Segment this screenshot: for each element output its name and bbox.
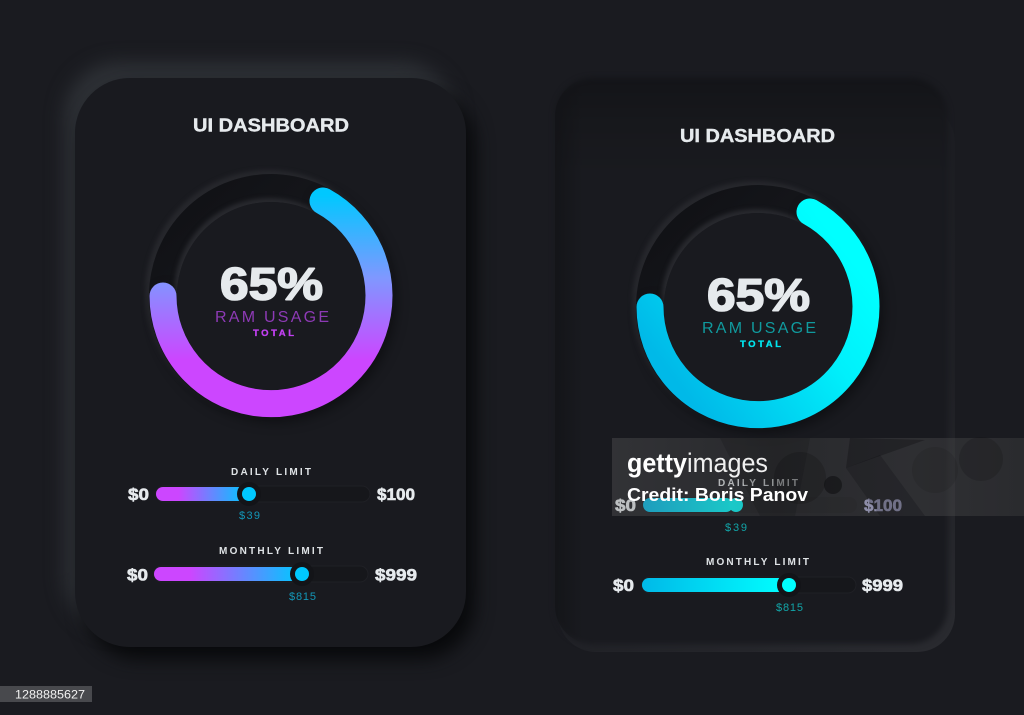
panel: cyan dashboard card <box>555 78 955 652</box>
slider: purple monthly limit: MONTHLY LIMIT <box>219 546 323 557</box>
slider: purple monthly limit: $0 <box>127 566 148 584</box>
watermark logo: images <box>687 448 768 478</box>
slider: cyan monthly limit <box>613 557 903 614</box>
slider: purple daily limit: $100 <box>377 485 415 504</box>
slider: purple daily limit: $0 <box>128 485 149 504</box>
slider: cyan monthly limit: $815 <box>776 602 803 614</box>
ring value: 65% <box>220 258 323 310</box>
heading: cyan card title: UI DASHBOARD <box>680 126 835 146</box>
slider: cyan monthly limit: MONTHLY LIMIT <box>706 557 809 568</box>
watermark logo: getty <box>627 448 687 478</box>
slider: purple daily limit: DAILY LIMIT <box>231 467 311 478</box>
chart: cyan RAM usage ring <box>632 181 880 429</box>
slider: cyan daily limit: $39 <box>725 522 747 534</box>
slider: cyan daily limit: $100 <box>864 496 902 515</box>
slider: purple monthly limit: $815 <box>289 591 316 603</box>
slider: cyan daily limit: $0 <box>615 496 636 515</box>
watermark banner <box>612 437 1024 516</box>
panel: purple dashboard card <box>64 62 475 659</box>
ring sublabel: TOTAL <box>253 328 294 339</box>
image id tag <box>0 686 92 702</box>
slider: cyan daily limit: DAILY LIMIT <box>718 478 798 489</box>
watermark credit: Credit: Boris Panov <box>627 485 808 505</box>
slider: purple daily limit: $39 <box>239 510 260 522</box>
slider: cyan monthly limit: $999 <box>862 576 903 595</box>
slider: purple daily limit <box>128 467 415 522</box>
ring value: 65% <box>707 270 810 320</box>
ring label: RAM USAGE <box>215 309 329 326</box>
ring label: RAM USAGE <box>702 320 816 337</box>
ring sublabel: TOTAL <box>740 339 781 350</box>
slider: purple monthly limit: $999 <box>375 566 417 584</box>
slider: purple monthly limit <box>127 546 417 603</box>
slider: cyan daily limit <box>615 478 902 534</box>
slider: cyan monthly limit: $0 <box>613 576 634 595</box>
watermark logo <box>627 448 768 478</box>
heading: purple card title: UI DASHBOARD <box>193 116 349 136</box>
chart: purple RAM usage ring <box>145 170 393 418</box>
image id tag: 1288885627 <box>15 690 85 702</box>
